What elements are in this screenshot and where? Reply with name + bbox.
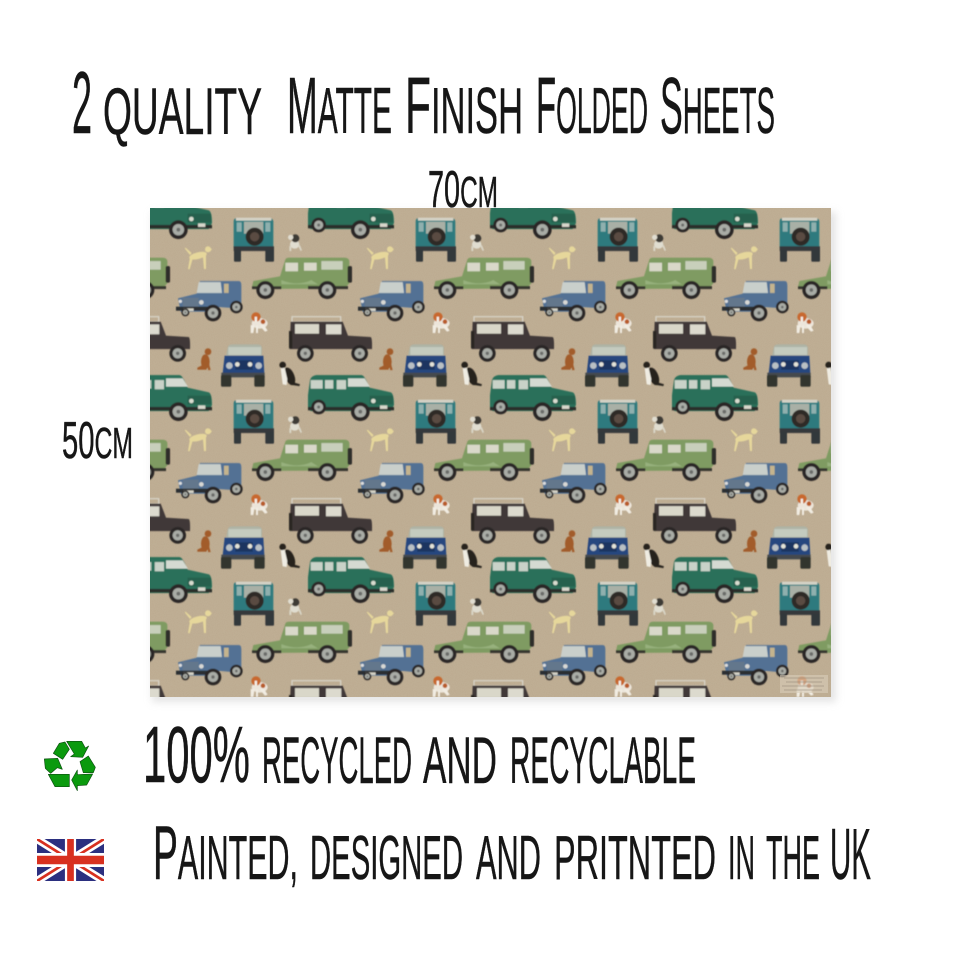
icon: union jack flag xyxy=(37,839,104,881)
made in UK statement: PRITNTED xyxy=(554,824,716,893)
height label: 50cm: 50CM xyxy=(62,412,133,470)
title: 2 xyxy=(72,53,92,152)
made in UK statement: DESIGNED xyxy=(310,824,463,893)
width label: 70cm: 70CM xyxy=(428,161,498,219)
made in UK statement: PAINTED, xyxy=(153,811,298,896)
recycled statement xyxy=(143,710,696,799)
text: SHEETS xyxy=(660,61,775,150)
made in UK statement: THE xyxy=(766,824,820,893)
made in UK statement xyxy=(153,811,871,896)
panel: wrapping paper sheet with vehicle pattern xyxy=(150,208,831,697)
sheet shadow xyxy=(152,212,836,702)
title: FOLDED xyxy=(536,61,648,150)
recycled statement: AND xyxy=(423,723,497,797)
text: UK xyxy=(830,815,871,895)
title xyxy=(72,53,775,152)
made in UK statement: AND xyxy=(476,824,541,893)
text: RECYCLABLE xyxy=(510,723,696,797)
icon: recycling arrows xyxy=(44,741,95,791)
recycled statement: 100% xyxy=(143,710,250,799)
made in UK statement: IN xyxy=(728,824,755,893)
title: FINISH xyxy=(405,61,523,150)
recycled statement: RECYCLED xyxy=(262,723,412,797)
title: QUALITY xyxy=(103,74,262,148)
title: MATTE xyxy=(287,61,392,150)
